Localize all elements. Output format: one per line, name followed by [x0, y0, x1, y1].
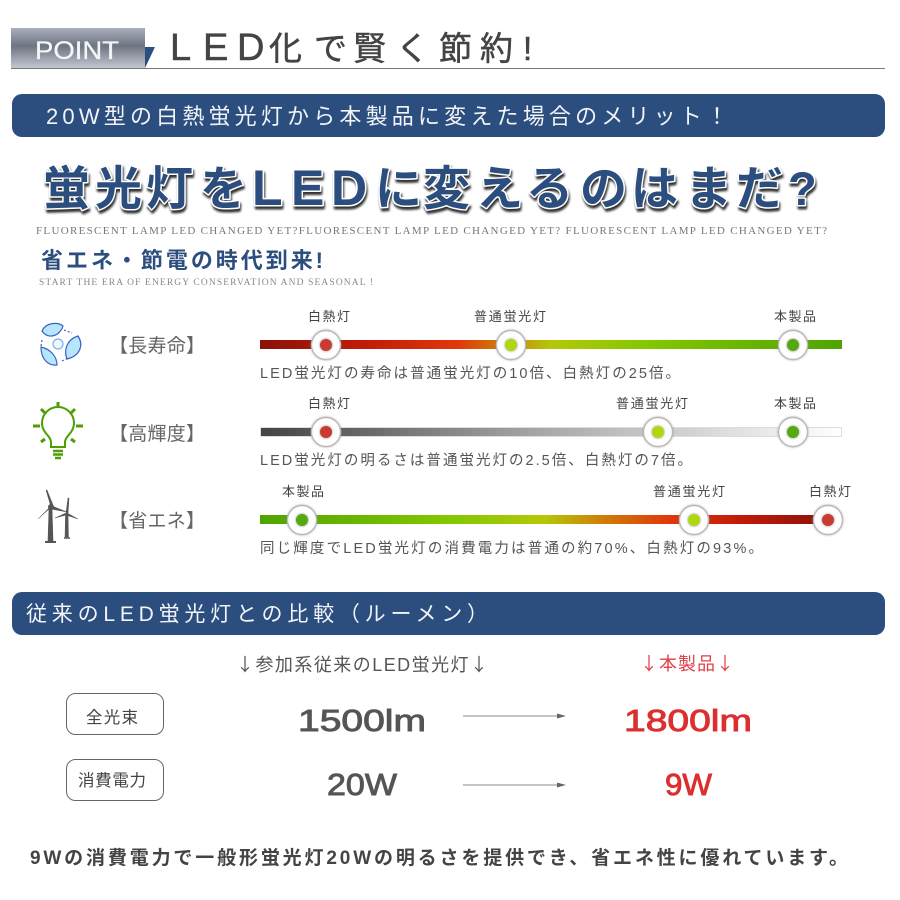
- icon: wind turbines: [38, 490, 78, 542]
- bar with markers: 普通蛍光灯: [474, 309, 546, 324]
- bar with markers: [260, 309, 842, 360]
- label box: 全光束: [86, 708, 138, 727]
- bar with markers: [260, 484, 851, 534]
- row: total luminous flux: [66, 694, 752, 738]
- title text: LED化で賢く節約!: [170, 27, 532, 69]
- POINT tab: [11, 28, 155, 68]
- row: long life: [41, 309, 842, 382]
- product value: 1800lm: [624, 703, 752, 738]
- bar with markers: 普通蛍光灯: [653, 484, 725, 499]
- column heading: conventional: ↓参加系従来のLED蛍光灯↓: [236, 651, 488, 677]
- arrow: [463, 714, 566, 718]
- POINT tab: POINT: [35, 37, 119, 65]
- bar with markers: 本製品: [282, 484, 324, 499]
- row: power consumption: [66, 760, 713, 802]
- label: 【高輝度】: [109, 423, 205, 445]
- conventional value: 20W: [327, 767, 398, 802]
- bar with markers: 普通蛍光灯: [616, 396, 688, 411]
- bar with markers: 本製品: [774, 396, 816, 411]
- icon: leaves: [41, 323, 81, 365]
- description: LED蛍光灯の明るさは普通蛍光灯の2.5倍、白熱灯の7倍。: [260, 452, 692, 469]
- label box: 消費電力: [78, 771, 146, 790]
- description: LED蛍光灯の寿命は普通蛍光灯の10倍、白熱灯の25倍。: [260, 365, 680, 382]
- label box: [66, 694, 164, 734]
- label: 【長寿命】: [109, 335, 205, 357]
- bar with markers: 白熱灯: [308, 396, 350, 411]
- bar with markers: 本製品: [774, 309, 816, 324]
- icon: light bulb: [33, 402, 83, 458]
- column heading: this product: ↓本製品↓: [640, 650, 734, 676]
- english secondary subtitle: START THE ERA OF ENERGY CONSERVATION AND SEASONAL !: [39, 278, 373, 288]
- bar with markers: 白熱灯: [308, 309, 350, 324]
- bar with markers: [260, 396, 842, 446]
- header: POINT title: [11, 27, 885, 69]
- closing statement: 9Wの消費電力で一般形蛍光灯20Wの明るさを提供でき、省エネ性に優れています。: [30, 846, 848, 869]
- english subtitle: FLUORESCENT LAMP LED CHANGED YET?FLUORESCENT LAMP LED CHANGED YET? FLUORESCENT LAMP LED CHANGED YET?: [36, 225, 827, 237]
- banner: merit: 20W型の白熱蛍光灯から本製品に変えた場合のメリット！: [46, 104, 728, 129]
- label box: [66, 760, 164, 800]
- main heading: 蛍光灯をLEDに変えるのはまだ?: [43, 160, 817, 216]
- row: high brightness: [33, 396, 842, 469]
- label: 【省エネ】: [109, 510, 205, 532]
- arrow: [463, 782, 566, 788]
- row: energy saving: [38, 484, 851, 557]
- banner: merit: [12, 94, 885, 137]
- header rule: [11, 68, 885, 69]
- description: 同じ輝度でLED蛍光灯の消費電力は普通の約70%、白熱灯の93%。: [260, 540, 763, 557]
- bar with markers: 白熱灯: [809, 484, 851, 499]
- banner: lumen comparison: 従来のLED蛍光灯との比較（ルーメン）: [26, 603, 488, 626]
- product value: 9W: [665, 767, 713, 802]
- secondary heading: 省エネ・節電の時代到来!: [41, 248, 323, 273]
- banner: lumen comparison: [12, 592, 885, 635]
- conventional value: 1500lm: [298, 703, 426, 738]
